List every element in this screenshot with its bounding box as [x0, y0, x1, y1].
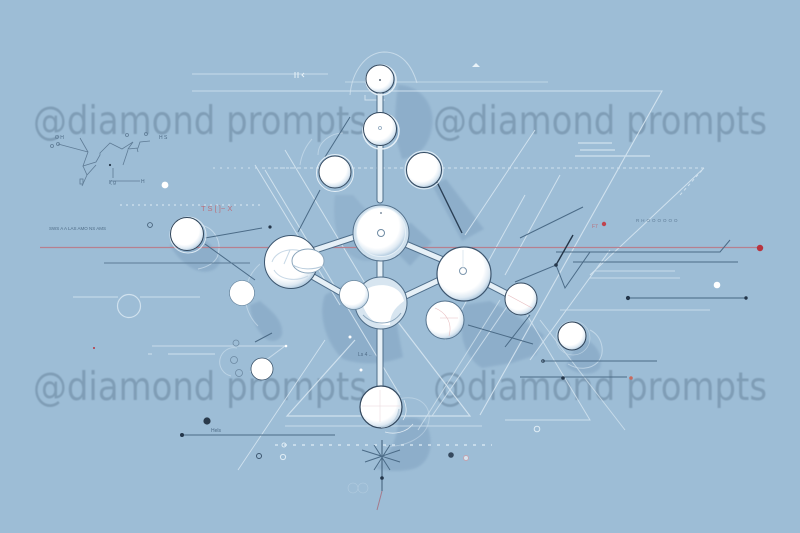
small chemistry labels: RHOOOOOO: [636, 218, 680, 223]
atom: far left: [170, 217, 206, 253]
connector bonds: [300, 80, 515, 400]
atom: right large: [437, 247, 491, 301]
small chemistry labels: l( g: [109, 180, 116, 186]
atom: upper right: [405, 151, 443, 189]
atom: bottom: [360, 386, 413, 433]
small chemistry labels: Hels: [211, 428, 222, 434]
small chemistry labels: H: [141, 179, 145, 185]
watermark top: [33, 99, 767, 144]
red formula notes: F7: [592, 224, 598, 230]
atom: right lower: [426, 301, 464, 339]
atom: upper: [363, 112, 399, 149]
red formula notes: [201, 204, 598, 230]
soft shadows behind atoms: [170, 85, 601, 471]
atom: far right: [556, 321, 590, 355]
small chemistry labels: SWS A A LAS AMO NS AMS: [49, 226, 106, 231]
dark annotation lines: [104, 117, 746, 510]
nodes and small marks: [93, 63, 748, 493]
small chemistry labels: O H: [55, 135, 64, 141]
small chemistry labels: H S: [159, 135, 168, 141]
watermark top: @diamond prompts: [33, 99, 367, 144]
red formula notes: T S [ ]~ X: [201, 204, 232, 213]
atom: right small: [505, 283, 537, 315]
chemical structure sketch, top left: [50, 132, 150, 186]
atom: upper left: [316, 154, 354, 192]
atom: central top: [353, 205, 409, 261]
atom: central lower: [355, 277, 407, 329]
atom: small left: [230, 280, 254, 306]
dotted horizontal axis: [275, 444, 492, 446]
red horizontal axis line: [40, 245, 763, 251]
watermark bottom: [33, 365, 767, 410]
atom: top: [366, 65, 396, 95]
atom: small over lower: [340, 280, 368, 310]
atom: large left pair: [264, 236, 324, 288]
atom: lower small left: [251, 358, 273, 380]
watermark bottom: @diamond prompts: [33, 365, 367, 410]
geometric white line grid: [73, 52, 710, 470]
small chemistry labels: [49, 135, 680, 434]
small chemistry labels: Ls 4 ..: [358, 352, 372, 358]
